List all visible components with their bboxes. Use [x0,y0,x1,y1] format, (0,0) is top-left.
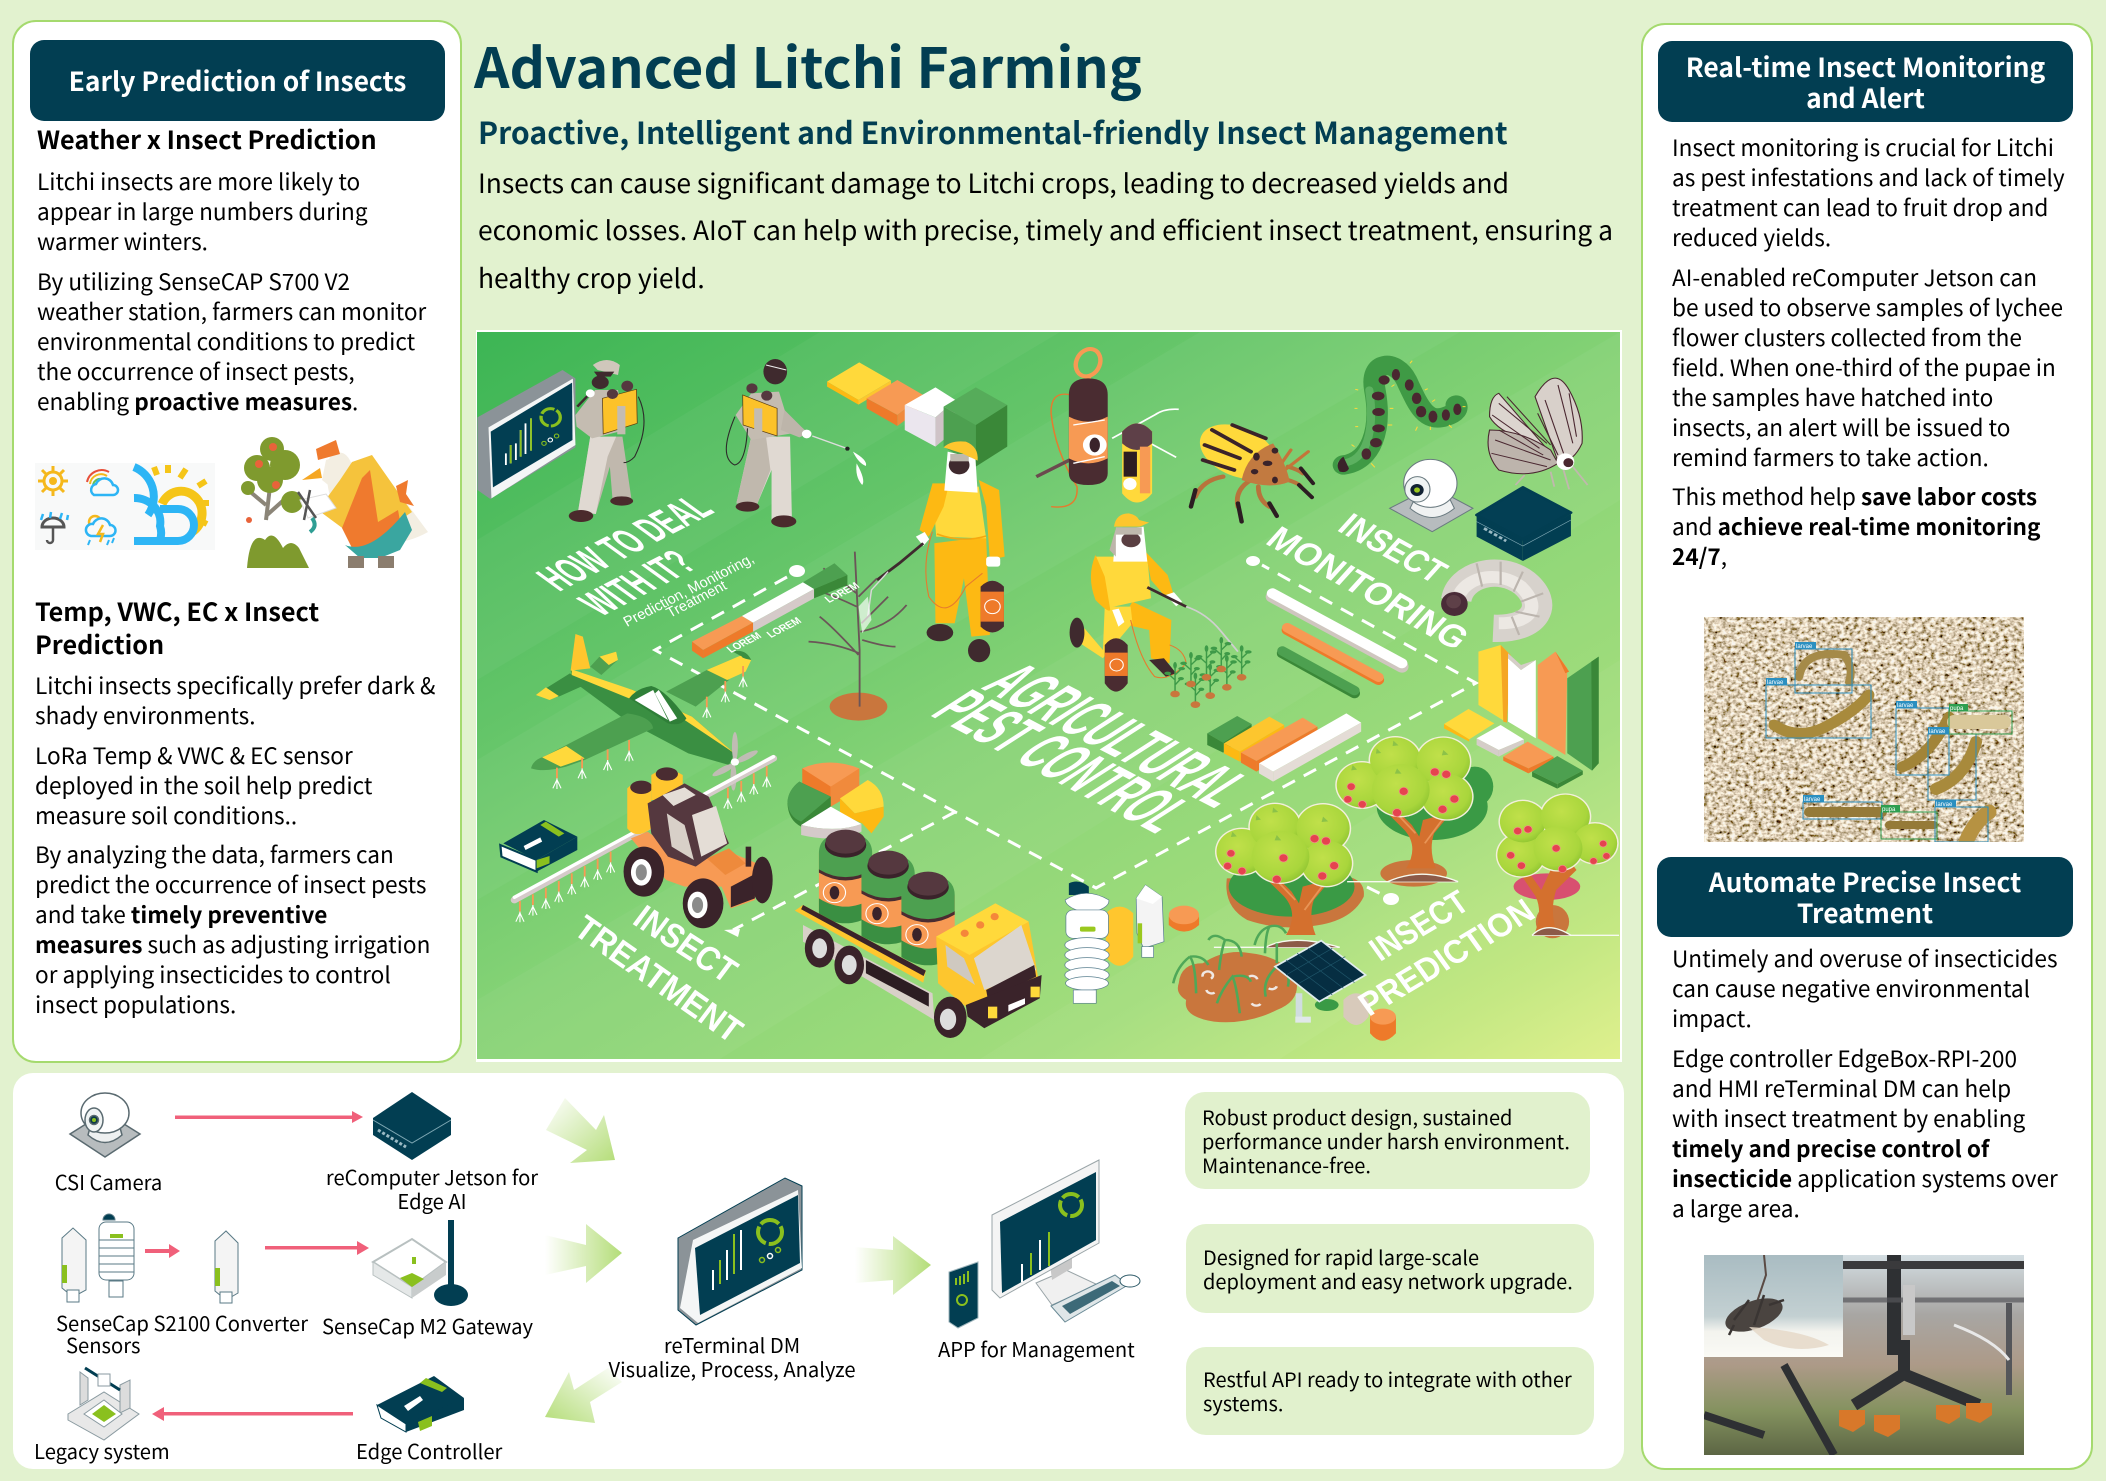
text block: preventive measures: or applying insecticides to control [35,957,391,990]
text block: weather station [37,264,426,417]
flow label: sensors and converter: SenseCap S2100 Converter [56,1308,308,1337]
big arrow: gateway to terminal [545,1224,622,1283]
map label: how to deal with it: HOW TO DEAL [526,488,724,598]
text block: preventive measures: and take timely preventive [35,897,327,930]
map label: insect treatment: INSECT [626,898,745,990]
icon: small spray can [1112,409,1179,502]
title: Advanced Litchi Farming [474,24,1142,104]
map label: agricultural pest control [916,653,1269,843]
text block: warmer winters: appear in large numbers during [37,194,368,227]
text block: weather station: the occurrence of insect pests, [37,354,355,387]
text block: overuse of insecticides: impact. [1672,1001,1752,1034]
map label: insect prediction: INSECT [1363,883,1476,968]
photo: drone nozzles and dead fly [1704,1255,2024,1455]
icon: weather station sensor [1065,881,1133,1003]
map label: how to deal with it [526,488,724,623]
icon: reterminal dm [678,1178,802,1325]
flow label: sensors and converter [56,1308,308,1359]
soil blotches and foliage behind trees [1226,767,1580,938]
text block: edge controller treatment: a large area. [1672,1191,1800,1224]
text block: overuse of insecticides [1672,941,2058,1034]
text block: warmer winters [37,164,368,257]
map label: lorem placeholders: LOREM [764,615,804,640]
heading: real-time insect monitoring and alert: Real-time Insect Monitoring [1686,46,2045,84]
subheading: weather x insect prediction: Weather x Insect Prediction [37,121,377,157]
text block: warmer winters: Litchi insects are more likely to [37,164,360,197]
heading: automate precise insect treatment: Automate Precise Insect [1709,861,2021,900]
subtitle: Proactive, Intelligent and Environmental-friendly Insect Management [478,109,1508,153]
orange cylinder [1169,906,1199,932]
isometric blocks: yellow orange white green [827,362,1007,467]
flow label: legacy system: Legacy system [34,1436,170,1465]
text block: preventive measures [35,837,430,1020]
worker with backpack sprayer 1 [569,360,644,522]
route end dots [724,556,1399,937]
big arrow: terminal to app [855,1236,931,1295]
flow label: m2 gateway: SenseCap M2 Gateway [322,1311,533,1340]
map label: insect prediction: PREDICTION [1352,892,1542,1023]
flow label: recomputer jetson [326,1162,538,1215]
text block: soil sensor [35,738,372,831]
map label: lorem placeholders: LOREM [822,580,862,605]
text block: ai-enabled recomputer: insects, an alert will be issued to [1672,410,2010,443]
panel: real-time monitoring and treatment [1641,23,2093,1470]
callout: rapid deployment: deployment and easy network upgrade. [1203,1266,1573,1294]
panel: early prediction of insects [12,20,462,1063]
text block: preventive measures: By analyzing the data, farmers can [35,837,394,870]
flow label: reterminal dm [608,1330,856,1383]
flow label: recomputer jetson: Edge AI [397,1186,467,1215]
worker with backpack sprayer 2 [726,359,866,527]
icon: green caterpillar [1338,361,1466,472]
flow label: edge controller: Edge Controller [356,1436,502,1465]
seedlings [1164,637,1252,708]
pie chart [787,762,884,838]
map label: lorem placeholders [724,580,862,655]
text block: ai-enabled recomputer: remind farmers to take action. [1672,440,1989,473]
intro paragraph: healthy crop yield. [478,256,705,296]
isometric stepped bars [1207,713,1361,782]
text block: edge controller treatment [1672,1041,2058,1224]
detection labels: larvae [1767,680,1784,686]
icon: converter sensor [1136,885,1164,957]
text block: preventive measures: predict the occurrence of insect pests [35,867,426,900]
icon: tablet dashboard [477,370,575,499]
subheading: temp, vwc, ec x insect prediction: Temp, VWC, EC x Insect [35,593,319,629]
detection labels: larvae [1796,644,1813,650]
detection labels: larvae [1804,797,1821,803]
text block: overuse of insecticides: can cause negative environmental [1672,971,2030,1004]
big arrow: terminal to edge controller [545,1368,622,1423]
inset: dead fly photo [1704,1255,1843,1357]
icon: rainbow and cloud [87,470,118,495]
arrow: converter to gateway [265,1241,369,1255]
photo: larvae detection on wood shavings [1704,617,2024,842]
text block: ai-enabled recomputer: field. When one-third of the pupae in [1672,350,2056,383]
callout: restful api [1186,1347,1594,1435]
soil bed with seedlings and grubs [1173,926,1297,1022]
callout: rapid deployment: Designed for rapid large-scale [1203,1242,1479,1270]
arrow: sensors to converter [145,1244,180,1258]
icon: umbrella in rain [41,512,68,543]
larvae [1774,654,2004,842]
map label: insect treatment: TREATMENT [567,908,750,1051]
text block: weather station: enabling proactive measures. [37,384,358,417]
tree [241,437,309,568]
map label: insect monitoring: MONITORING [1259,520,1477,657]
truck with three insecticide tanks [795,830,1042,1038]
flow diagram icons and arrows [62,1092,1140,1440]
spray boom [514,757,773,922]
isometric tiles [1444,709,1583,789]
map label: prediction, monitoring, treatment [621,551,757,630]
text block: monitoring crucial: as pest infestations and lack of timely [1672,160,2065,193]
isometric bar chart [1478,645,1599,771]
text block: monitoring crucial: reduced yields. [1672,220,1831,253]
intro paragraph: economic losses. AIoT can help with precise, timely and efficient insect treatment, ensuring a [478,209,1613,248]
tractor [624,767,773,928]
detection labels [1766,642,1968,813]
heading: real-time insect monitoring and alert: and Alert [1806,76,1925,116]
worker kneeling with sprayer [1070,513,1238,692]
illustration: goose gardener pruning tree [241,437,428,568]
big arrow: edge to terminal [546,1098,615,1163]
litchi tree 3 [1496,793,1619,935]
icon: recomputer jetson box [1477,487,1571,561]
icon: recomputer jetson [373,1092,451,1160]
text block: ai-enabled recomputer [1672,260,2063,473]
icon group: weather icons [38,463,209,546]
callout: robust design [1185,1092,1590,1189]
panel: system architecture flow [13,1073,1624,1469]
intro paragraph: Insects can cause significant damage to Litchi crops, leading to decreased yields and [478,162,1509,200]
airplane crop duster [531,634,759,791]
text block: monitoring crucial: treatment can lead to fruit drop and [1672,190,2048,223]
heading: early prediction of insects: Early Prediction of Insects [69,60,406,99]
bare tree sapling [809,552,907,721]
text block: soil sensor: deployed in the soil help predict [35,768,372,801]
heading: real-time insect monitoring and alert [1658,41,2073,122]
map label: agricultural pest control: AGRICULTURAL [967,653,1269,817]
text block: edge controller treatment: timely and precise control of [1672,1131,1989,1164]
icon: csi camera [1390,459,1473,532]
flow label: recomputer jetson: reComputer Jetson for [326,1162,538,1191]
map label: prediction, monitoring, treatment: Treatment [664,578,730,621]
callout: restful api: systems. [1203,1388,1283,1417]
text block: edge controller treatment: insecticide application systems over [1672,1161,2058,1194]
subheading: temp, vwc, ec x insect prediction: Prediction [35,626,164,662]
detection labels: larvae [1936,802,1953,808]
icon: weather station [99,1214,134,1297]
text block: ai-enabled recomputer: be used to observe samples of lychee [1672,290,2063,323]
text block: save labor: and achieve real-time monitoring [1672,509,2041,542]
text block: preventive measures: insect populations. [35,987,236,1020]
text block: save labor [1672,479,2041,572]
icon: sun [38,466,68,496]
callout: robust design: Robust product design, sustained [1202,1102,1512,1130]
icon: thunder cloud [86,516,116,545]
isometric round bars [1272,593,1402,693]
icon: colorado beetle [1190,413,1313,522]
map label: prediction, monitoring, treatment: Prediction, Monitoring, [621,551,757,630]
callout: robust design: Maintenance-free. [1202,1150,1371,1178]
text block: edge controller treatment: Edge controller EdgeBox-RPI-200 [1672,1041,2017,1074]
text block: save labor: This method help save labor costs [1672,479,2037,512]
flow label: reterminal dm: reTerminal DM [664,1330,800,1359]
text block: save labor: 24/7, [1672,539,1727,572]
text block: monitoring crucial: Insect monitoring is crucial for Litchi [1672,130,2054,163]
callout: robust design: performance under harsh environment. [1202,1126,1570,1154]
icon: moth [1488,378,1588,489]
flow label: sensors and converter: Sensors [66,1330,140,1359]
heading: automate precise insect treatment [1657,857,2073,937]
heading: early prediction of insects [30,40,445,121]
icon: csi camera [70,1093,140,1157]
heading: automate precise insect treatment: Treatment [1797,892,1933,931]
icon: phone app [949,1262,978,1328]
detection labels: pupa [1950,706,1964,712]
text block: overuse of insecticides: Untimely and overuse of insecticides [1672,941,2058,974]
text block: soil sensor: measure soil conditions.. [35,798,297,831]
text block: soil sensor: LoRa Temp & VWC & EC sensor [35,738,353,771]
text block: edge controller treatment: with insect treatment by enabling [1672,1101,2025,1134]
illustration: agricultural pest control isometric map [476,330,1622,1062]
icon: desktop monitor and keyboard [992,1160,1140,1322]
text block: ai-enabled recomputer: AI-enabled reComputer Jetson can [1672,260,2037,293]
arrow: camera to recomputer [175,1111,363,1123]
orange nozzles [1839,1403,1992,1437]
intro paragraph [478,162,1613,296]
map label: agricultural pest control: PEST CONTROL [916,681,1210,843]
icon: edge controller box [500,820,577,872]
icon: big pesticide sprayer tank [1036,346,1108,507]
icon: edge controller [377,1376,464,1432]
icon: white grub [1441,562,1543,635]
drone frame [1704,1255,2024,1455]
callout: rapid deployment [1186,1224,1594,1313]
worker in yellow suit with sprayer [868,441,1005,662]
text block: weather station: weather station, farmers can monitor [37,294,426,327]
detection labels: larvae [1897,703,1914,709]
text block: preventive measures: measures such as adjusting irrigation [35,927,430,960]
icon: m2 gateway with antenna [373,1220,468,1306]
dashed route lines [655,565,1476,930]
map label: lorem placeholders: LOREM [724,630,764,655]
detection labels: pupa [1882,807,1896,813]
icon: legacy system machine [68,1368,139,1440]
icon: s2100 sensor [62,1228,86,1302]
text block: edge controller treatment: and HMI reTerminal DM can help [1672,1071,2011,1104]
icon: solar panel [1275,941,1366,1023]
litchi tree 2 [1335,736,1474,868]
map label: how to deal with it: WITH IT? [568,543,707,623]
callout: restful api: Restful API ready to integrate with other [1203,1364,1572,1393]
text block: dark and shady: Litchi insects specifically prefer dark & [35,668,435,701]
floor bar: orange white green [692,563,847,658]
tree ground lines [1214,874,1619,947]
text block: weather station: By utilizing SenseCAP S700 V2 [37,264,350,297]
map label: insect monitoring: INSECT [1331,507,1455,590]
flow label: csi camera: CSI Camera [55,1167,162,1196]
flow label: app for management: APP for Management [938,1334,1135,1363]
text block: dark and shady [35,668,435,731]
text block: weather station: environmental conditions to predict [37,324,415,357]
detection boxes [1766,649,2012,842]
flow label: reterminal dm: Visualize, Process, Analyze [608,1354,856,1383]
arrow: edge controller to legacy system [152,1407,353,1421]
beige and orange cylinders [1343,993,1396,1041]
icon: converter [215,1231,238,1303]
subheading: temp, vwc, ec x insect prediction [35,593,319,662]
text block: warmer winters: warmer winters. [37,224,208,257]
text block: dark and shady: shady environments. [35,698,255,731]
litchi tree 1 [1215,803,1353,935]
text block: ai-enabled recomputer: flower clusters collected from the [1672,320,2022,353]
text block: monitoring crucial [1672,130,2065,253]
detection labels: larvae [1929,729,1946,735]
icon: big sun and cloud [134,465,209,541]
goose [298,440,428,568]
text block: ai-enabled recomputer: the samples have hatched into [1672,380,1993,413]
